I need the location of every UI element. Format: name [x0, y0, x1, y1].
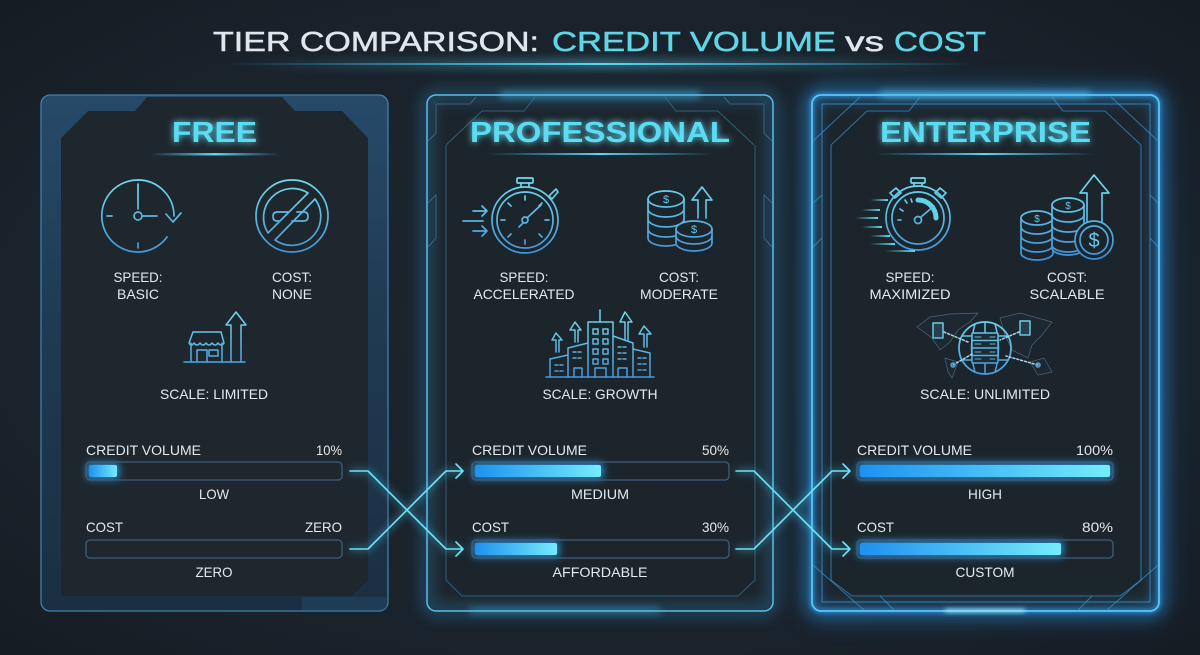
icon: speed lines [855, 199, 915, 252]
bar: professional credit volume: 50% [702, 442, 729, 458]
label: speed maximized: SPEED: [886, 269, 934, 285]
label: speed maximized: MAXIMIZED [870, 286, 950, 302]
icon: coin stacks with arrow [648, 187, 712, 251]
label: cost none [272, 269, 312, 302]
panel: enterprise [812, 92, 1159, 612]
label: speed maximized [870, 269, 950, 302]
heading: free: FREE [172, 117, 257, 149]
bar: professional credit volume: CREDIT VOLUME [472, 442, 587, 458]
label: speed basic: SPEED: [114, 269, 162, 285]
bar: free cost: ZERO [305, 519, 342, 535]
icon: scalable coin stacks: $ [1065, 201, 1071, 212]
arrows: free to professional [350, 464, 463, 556]
label: scale limited: SCALE: LIMITED [160, 386, 268, 402]
icon: scalable coin stacks: $ [1088, 230, 1100, 252]
icon: coin stacks with arrow: $ [663, 194, 669, 206]
bar: enterprise cost: 80% [1082, 519, 1113, 535]
label: speed basic [114, 269, 162, 302]
title: COST [894, 26, 986, 57]
arrows: professional to enterprise [736, 464, 850, 556]
label: speed accelerated: ACCELERATED [474, 286, 574, 302]
icon: scalable coin stacks: $ [1034, 214, 1040, 225]
label: speed accelerated: SPEED: [500, 269, 548, 285]
bar: professional credit volume: MEDIUM [571, 486, 629, 502]
icon: small store [184, 312, 246, 362]
bar: professional credit volume [472, 442, 729, 502]
heading: enterprise: ENTERPRISE [880, 117, 1091, 149]
bar: professional cost: 30% [702, 519, 729, 535]
icon: stopwatch with motion arrows [463, 178, 558, 253]
icon: global server network [917, 313, 1052, 378]
bar: enterprise cost: COST [857, 519, 894, 535]
title: TIER COMPARISON: [213, 26, 539, 57]
label: cost none: NONE [272, 286, 312, 302]
title: CREDIT VOLUME [552, 26, 836, 57]
bar: enterprise credit volume [857, 442, 1113, 502]
label: speed basic: BASIC [117, 286, 159, 302]
icon: coin stacks with arrow: $ [691, 224, 697, 236]
bar: enterprise credit volume: CREDIT VOLUME [857, 442, 972, 458]
label: cost scalable: SCALABLE [1030, 286, 1104, 302]
panel: free [41, 95, 388, 611]
icon: city growth [546, 310, 654, 377]
bar: professional cost: AFFORDABLE [552, 564, 648, 580]
label: cost none: COST: [272, 269, 312, 285]
bar: enterprise cost: CUSTOM [956, 564, 1014, 580]
label: cost moderate: MODERATE [640, 286, 718, 302]
bar: enterprise credit volume: HIGH [968, 486, 1002, 502]
bar: free credit volume: 10% [316, 442, 342, 458]
title [213, 26, 986, 57]
label: cost moderate: COST: [659, 269, 699, 285]
label: cost moderate [640, 269, 718, 302]
bar: enterprise credit volume: 100% [1076, 442, 1113, 458]
panel: professional [427, 92, 773, 613]
bar: professional cost: COST [472, 519, 509, 535]
icon: scalable coin stacks [1021, 175, 1113, 260]
label: cost scalable: COST: [1047, 269, 1087, 285]
bar: free cost: ZERO [196, 564, 233, 580]
label: scale unlimited: SCALE: UNLIMITED [920, 386, 1050, 402]
label: cost scalable [1030, 269, 1104, 302]
bar: free credit volume: CREDIT VOLUME [86, 442, 201, 458]
icon: speedometer stopwatch [886, 178, 950, 250]
bar: enterprise cost [857, 519, 1113, 580]
bar: free credit volume [86, 442, 342, 502]
bar: free cost [86, 519, 342, 580]
label: speed accelerated [474, 269, 574, 302]
title: vs [845, 26, 884, 57]
bar: professional cost [472, 519, 729, 580]
bar: free credit volume: LOW [199, 486, 230, 502]
label: scale growth: SCALE: GROWTH [542, 386, 658, 402]
heading: professional: PROFESSIONAL [470, 117, 730, 149]
icon: clock [102, 180, 181, 252]
bar: free cost: COST [86, 519, 123, 535]
icon: no cost [256, 180, 328, 252]
